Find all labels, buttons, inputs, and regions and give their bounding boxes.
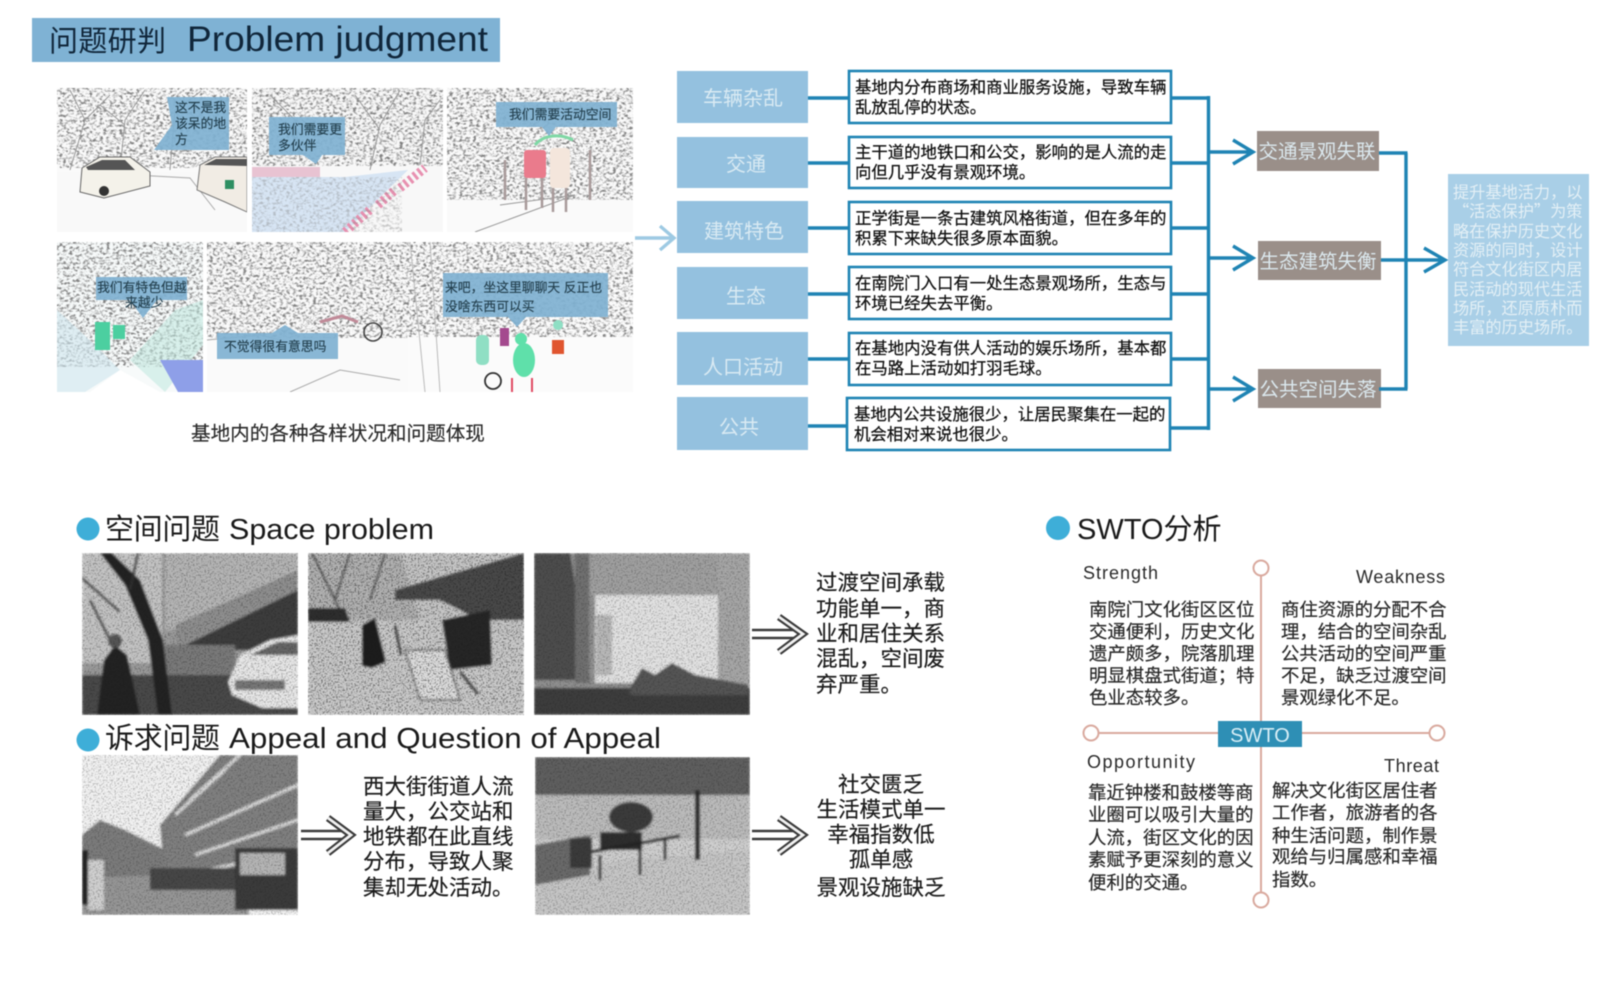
quadrant: threat: [1272, 756, 1439, 890]
panel: strategy: 民活动的现代生活: [1453, 281, 1582, 299]
quadrant: threat: Threat: [1384, 756, 1439, 776]
photo: storefront with tree and car: [81, 552, 299, 716]
SWTO center badge: SWTO: [1230, 725, 1290, 747]
panel: strategy: 场所，还原质朴而: [1453, 300, 1582, 318]
text: space problem conclusion: 业和居住关系: [816, 622, 945, 646]
text: appeal conclusion: 幸福指数低: [827, 823, 935, 847]
summary: 交通景观失联: [1257, 131, 1379, 171]
description: architecture: 正学街是一条古建筑风格街道，但在多年的: [855, 210, 1166, 228]
description: transit: 主干道的地铁口和公交，影响的是人流的走: [855, 144, 1166, 162]
category: 公共: 公共: [719, 416, 759, 439]
category: 生态: [677, 267, 808, 319]
arrow: space photos to conclusion: [752, 617, 803, 652]
axis cross with end circles: [1084, 560, 1444, 908]
category: 车辆杂乱: [677, 71, 808, 123]
quadrant: opportunity: 素赋予更深刻的意义: [1088, 849, 1254, 870]
description: traffic chaos: 乱放乱停的状态。: [855, 99, 986, 117]
panel: problem summaries: [1257, 131, 1381, 408]
category: 人口活动: 人口活动: [703, 356, 783, 379]
arrow: sketches to categories: [635, 226, 674, 250]
summary: 公共空间失落: 公共空间失落: [1259, 379, 1377, 401]
summary: 公共空间失落: [1258, 369, 1381, 408]
text: appeal conclusion: [816, 773, 946, 900]
description: ecology: 环境已经失去平衡。: [855, 294, 1003, 313]
description: public facilities: 机会相对来说也很少。: [854, 426, 1018, 444]
description: ecology: 在南院门入口有一处生态景观场所，生态与: [855, 275, 1166, 293]
sketch photo: parked cars: 方: [175, 132, 188, 147]
text: street crowd description: 集却无处活动。: [363, 876, 514, 900]
quadrant: opportunity: 靠近钟楼和鼓楼等商: [1088, 782, 1254, 803]
arrow: to 公共空间失落: [1208, 377, 1253, 401]
panel: street sketches with speech bubbles: [57, 88, 633, 392]
arrow: bench photo to conclusion: [752, 818, 803, 853]
quadrant: threat: 解决文化街区居住者: [1272, 780, 1438, 801]
description: public facilities: [847, 398, 1170, 450]
panel: strategy: 略在保护历史文化: [1453, 223, 1582, 241]
heading: space problem: Space problem: [229, 514, 434, 546]
sketch photo: people chatting: 没啥东西可以买: [445, 299, 535, 314]
description: architecture: [849, 202, 1171, 254]
text: street crowd description: [363, 775, 514, 900]
quadrant: threat: 种生活问题，制作景: [1272, 825, 1438, 846]
quadrant: weakness: [1281, 567, 1447, 708]
category: 交通: [677, 137, 808, 188]
sketch photo: bicycles by the road: 不觉得很有意思吗: [224, 339, 327, 354]
text: space problem conclusion: 弃严重。: [816, 673, 902, 697]
caption: 基地内的各种各样状况和问题体现: [191, 423, 485, 445]
arrow: to 生态建筑失衡: [1208, 246, 1253, 270]
title: Problem judgment: [187, 20, 488, 59]
photo: bench with bags: [534, 756, 751, 916]
quadrant: weakness: 商住资源的分配不合: [1281, 599, 1447, 620]
category: 生态: 生态: [726, 285, 766, 308]
photo: pavement vendor: [307, 552, 525, 716]
description: population activity: 在马路上活动如打羽毛球。: [855, 360, 1052, 378]
quadrant: weakness: 景观绿化不足。: [1281, 687, 1410, 708]
photo: busy west street: [81, 754, 299, 916]
quadrant: strength: 南院门文化街区区位: [1089, 599, 1255, 620]
photo: abandoned wall: [533, 552, 751, 716]
heading: appeal: [76, 722, 661, 755]
summary: 生态建筑失衡: [1258, 241, 1381, 280]
sketch photo: people chatting: 来吧，坐这里聊聊天 反正也: [445, 280, 602, 295]
description: transit: 向但几乎没有景观环境。: [855, 163, 1035, 182]
description: ecology: [849, 267, 1171, 319]
description: traffic chaos: [849, 71, 1171, 123]
quadrant: strength: Strength: [1083, 563, 1158, 583]
sketch photo: parked cars: 这不是我: [175, 100, 226, 115]
quadrant: opportunity: 业圈可以吸引大量的: [1088, 804, 1254, 825]
sketch photo: lonely green space: [251, 87, 444, 233]
panel: strategy: 提升基地活力，以: [1453, 184, 1582, 202]
arrow: street photo to text: [301, 818, 351, 853]
description: traffic chaos: 基地内分布商场和商业服务设施，导致车辆: [855, 79, 1166, 97]
connectors: categories to descriptions: [808, 98, 849, 426]
text: street crowd description: 地铁都在此直线: [363, 825, 514, 849]
summary: 生态建筑失衡: 生态建筑失衡: [1259, 251, 1377, 273]
SWTO center badge: [1218, 721, 1302, 747]
sketch photo: lonely green space: 多伙伴: [278, 138, 317, 153]
panel: strategy: “活态保护”为策: [1453, 198, 1582, 222]
sketch photo: lonely green space: 我们需要更: [278, 122, 342, 137]
quadrant: opportunity: Opportunity: [1087, 752, 1195, 772]
category: 车辆杂乱: 车辆杂乱: [703, 87, 783, 110]
title: 问题研判: [49, 25, 166, 58]
text: appeal conclusion: 生活模式单一: [816, 798, 946, 822]
sketch photo: crowd on pavement: 我们需要活动空间: [509, 107, 611, 122]
arrow: to 交通景观失联: [1208, 140, 1253, 164]
sketch photo: vanishing character: [56, 241, 204, 393]
text: space problem conclusion: 过渡空间承载: [816, 571, 945, 595]
heading: space problem: 空间问题: [105, 513, 220, 546]
quadrant: weakness: 公共活动的空间严重: [1281, 643, 1447, 664]
sketch photo: vanishing character: 来越少: [125, 295, 164, 310]
sketch photo: vanishing character: 我们有特色但越: [97, 280, 187, 295]
heading: space problem: [76, 513, 434, 546]
category: 交通: 交通: [726, 153, 766, 176]
connectors: descriptions merged to bus: [1170, 96, 1210, 430]
quadrant: threat: 指数。: [1272, 869, 1327, 890]
quadrant: weakness: 理，结合的空间杂乱: [1281, 621, 1447, 642]
panel: strategy: [1448, 174, 1589, 346]
quadrant: weakness: 不足，缺乏过渡空间: [1281, 665, 1447, 686]
panel: SWTO cross diagram: [1083, 560, 1447, 908]
description: public facilities: 基地内公共设施很少，让居民聚集在一起的: [854, 406, 1165, 424]
panel: strategy: 丰富的历史场所。: [1453, 319, 1582, 337]
summary: 交通景观失联: 交通景观失联: [1258, 141, 1376, 163]
text: space problem conclusion: 功能单一，商: [816, 597, 945, 621]
description: architecture: 积累下来缺失很多原本面貌。: [855, 230, 1068, 248]
heading: SWTO analysis: SWTO分析: [1077, 513, 1221, 546]
quadrant: strength: 交通便利，历史文化: [1089, 621, 1255, 642]
quadrant: strength: 遗产颇多，院落肌理: [1089, 643, 1255, 664]
heading: appeal: 诉求问题: [105, 722, 220, 755]
quadrant: strength: 色业态较多。: [1089, 687, 1199, 708]
panel: categories column: [677, 71, 808, 450]
text: street crowd description: 量大，公交站和: [363, 800, 514, 824]
quadrant: opportunity: 人流，街区文化的因: [1088, 827, 1254, 848]
sketch photo: parked cars: 该呆的地: [175, 116, 226, 131]
quadrant: weakness: Weakness: [1356, 567, 1445, 587]
category: 建筑特色: 建筑特色: [704, 220, 784, 243]
heading: appeal: Appeal and Question of Appeal: [229, 723, 661, 755]
sketch photo: crowd on pavement: [446, 87, 634, 232]
description: population activity: [849, 333, 1171, 385]
panel: strategy: 资源的同时，设计: [1453, 242, 1582, 260]
sketch photo: parked cars: [56, 87, 248, 214]
text: space problem conclusion: 混乱，空间废: [816, 647, 945, 671]
text: appeal conclusion: 孤单感: [849, 848, 913, 872]
quadrant: opportunity: 便利的交通。: [1088, 872, 1198, 893]
title: [32, 18, 500, 62]
panel: strategy: 符合文化街区内居: [1453, 261, 1582, 279]
quadrant: threat: 工作者，旅游者的各: [1272, 802, 1438, 823]
category: 人口活动: [677, 332, 808, 385]
text: appeal conclusion: 社交匮乏: [838, 773, 924, 797]
text: appeal conclusion: 景观设施缺乏: [816, 876, 946, 900]
description: population activity: 在基地内没有供人活动的娱乐场所，基本都: [855, 340, 1166, 358]
text: street crowd description: 分布，导致人聚: [363, 850, 514, 874]
category: 建筑特色: [677, 201, 808, 253]
quadrant: threat: 观给与归属感和幸福: [1272, 846, 1438, 867]
description: transit: [849, 137, 1171, 188]
quadrant: strength: [1083, 563, 1255, 708]
text: street crowd description: 西大街街道人流: [363, 775, 514, 799]
sketch photo: people chatting: [407, 241, 634, 393]
panel: problem descriptions: [847, 71, 1171, 450]
text: space problem conclusion: [816, 571, 945, 697]
sketch photo: bicycles by the road: [206, 241, 409, 392]
quadrant: strength: 明显棋盘式街道；特: [1089, 665, 1255, 686]
connectors and arrow: summaries to strategy: [1379, 153, 1445, 389]
category: 公共: [677, 397, 808, 450]
quadrant: opportunity: [1087, 752, 1254, 893]
